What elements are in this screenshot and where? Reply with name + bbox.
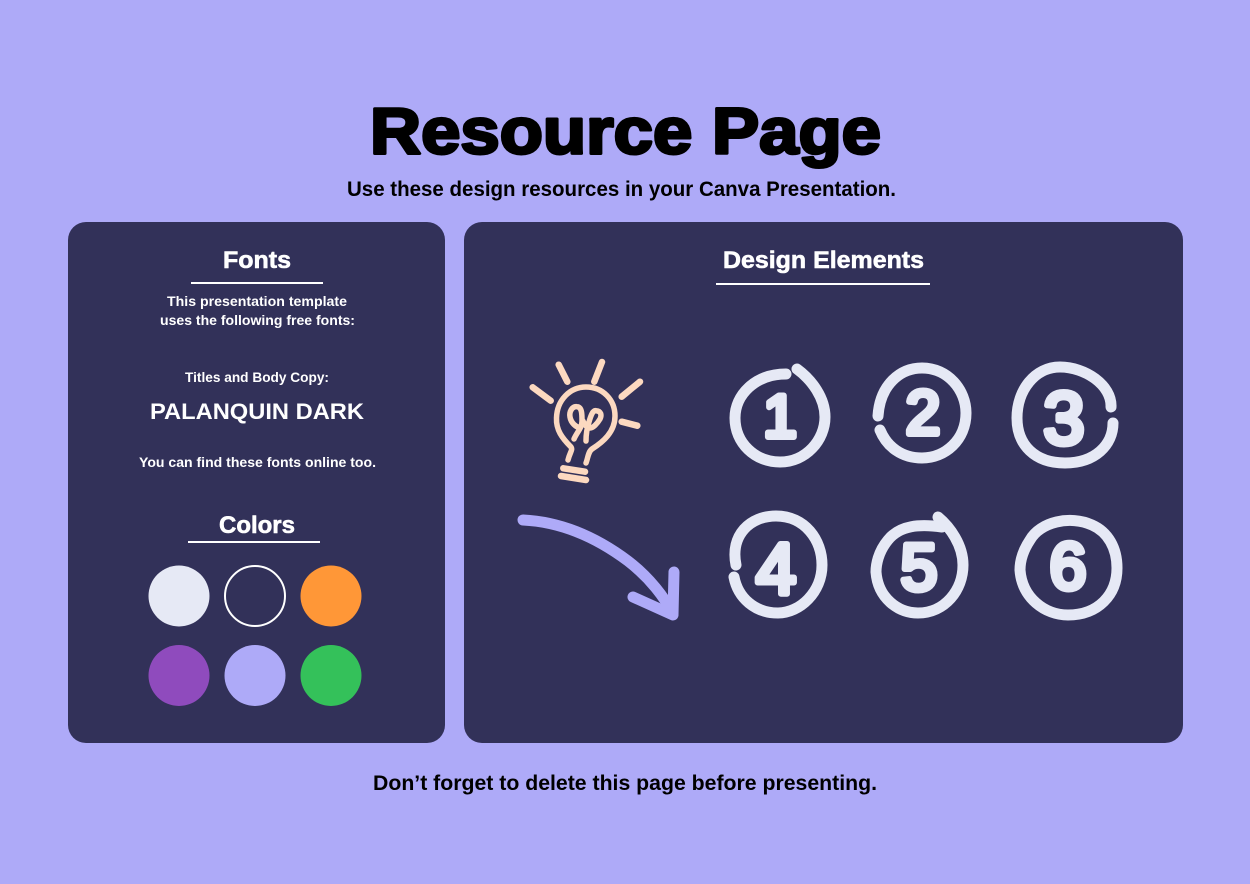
panel: design elements xyxy=(464,222,1183,743)
panel: fonts and colors xyxy=(68,222,445,743)
arrow xyxy=(523,520,674,615)
text block: font note: You can find these fonts online too. xyxy=(139,454,376,470)
icon: number 1 xyxy=(735,369,825,462)
icon: number 1: 1 xyxy=(763,383,797,450)
heading: colors: Colors xyxy=(219,512,295,539)
icon: number 3 xyxy=(1017,367,1113,463)
icon: number 2 xyxy=(878,368,966,458)
color swatches xyxy=(148,566,362,706)
subtitle: Use these design resources in your Canva Presentation. xyxy=(347,178,896,201)
label: titles and body copy: Titles and Body Copy: xyxy=(185,369,329,385)
icon: number 4: 4 xyxy=(756,530,796,610)
icon: number 3: 3 xyxy=(1043,377,1085,460)
icon: number 5 xyxy=(876,517,963,613)
text block: font intro xyxy=(160,293,355,328)
icon: light bulb xyxy=(533,362,640,480)
title: Resource Page xyxy=(370,94,881,168)
font name: PALANQUIN DARK xyxy=(150,399,364,424)
heading: fonts: Fonts xyxy=(223,247,291,274)
footer note: Don’t forget to delete this page before presenting. xyxy=(373,772,877,795)
text block: font intro: This presentation template xyxy=(167,293,347,309)
heading: design elements: Design Elements xyxy=(723,247,924,274)
icon: number 6 xyxy=(1020,520,1117,615)
text block: font intro: uses the following free fonts: xyxy=(160,312,355,328)
icon: number 4 xyxy=(734,516,822,613)
icon: number 6: 6 xyxy=(1050,529,1086,603)
icon: number 5: 5 xyxy=(901,530,937,604)
icon: number 2: 2 xyxy=(906,379,940,448)
